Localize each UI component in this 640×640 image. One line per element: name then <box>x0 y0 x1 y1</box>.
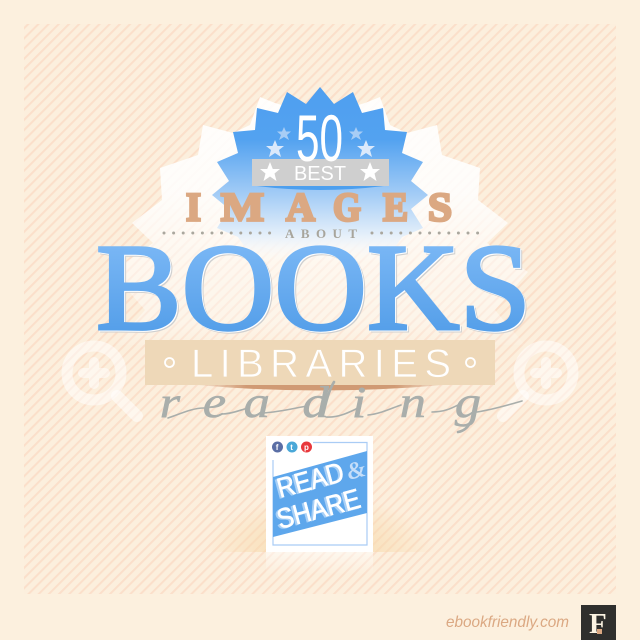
heading: images: I <box>186 184 201 230</box>
heading: images: A <box>286 184 315 230</box>
read and share lettering: SHARE <box>274 483 364 535</box>
read and share card <box>266 436 373 552</box>
script word: reading: reading <box>160 378 481 427</box>
heading: books: BOOKS <box>97 220 532 357</box>
libraries banner <box>145 340 495 390</box>
logo: F <box>589 608 607 640</box>
about divider: ABOUT <box>285 226 357 241</box>
icon: magnifier right <box>503 346 573 416</box>
heading: images: S <box>428 184 452 230</box>
read and share lettering: SHARE <box>272 484 362 536</box>
card reflection <box>266 552 373 575</box>
heading: images: M <box>221 184 264 230</box>
icon: twitter: t <box>290 443 293 452</box>
heading: images: E <box>383 184 408 230</box>
read and share lettering: READ <box>274 456 347 504</box>
number 50: 50 <box>296 101 343 175</box>
best ribbon: BEST <box>294 162 346 185</box>
read and share lettering: READ <box>272 457 345 505</box>
best ribbon <box>252 159 389 190</box>
heading: books: BOOKS <box>98 221 533 358</box>
icon: pinterest: p <box>304 443 309 452</box>
logo <box>581 605 616 640</box>
small stars beside 50 <box>266 127 375 157</box>
read and share lettering <box>272 456 369 536</box>
heading: books: BOOKS <box>96 219 531 356</box>
footer url: ebookfriendly.com <box>446 614 569 631</box>
icon: magnifier left <box>67 346 137 416</box>
libraries banner: LIBRARIES <box>191 342 451 386</box>
card glow <box>219 510 420 552</box>
white starburst <box>112 97 528 345</box>
read and share lettering: & <box>344 456 369 486</box>
icon: facebook: f <box>276 443 279 452</box>
heading: images <box>186 184 452 230</box>
heading: images: G <box>333 184 361 230</box>
blue starburst badge <box>212 87 428 262</box>
